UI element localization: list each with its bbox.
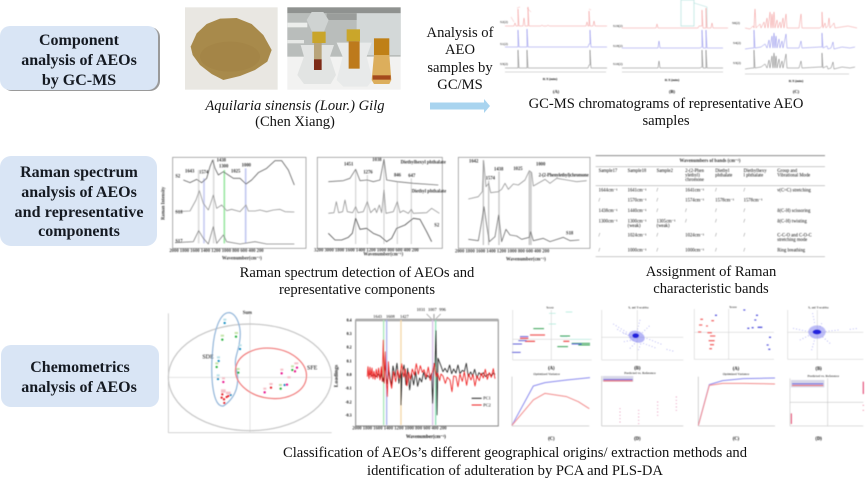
text: analysis step [427, 25, 494, 93]
table body rows: stretching mode [777, 238, 807, 243]
table body rows: Ring breathing [777, 248, 806, 253]
text: analysis step: Analysis of [427, 25, 494, 41]
chart: PCA loadings: -0.3 [345, 413, 352, 418]
chart: Raman spectra of samples: Wavenumber(cm⁻¹) [222, 255, 262, 261]
chart: Raman spectrum of 2-(2-phenylethyl)chromone: 2-(2-Phenylethyl)chromone [539, 173, 589, 178]
PC2 line [367, 340, 495, 397]
chart: PCA loadings: 996 [439, 307, 447, 312]
panel C: response curve: Optimized Variance [533, 372, 560, 376]
panel B: loading plot [788, 305, 863, 372]
PLS-DA panels, adulteration set [694, 305, 863, 442]
text: analysis step: AEO [445, 42, 475, 58]
chart: Raman spectra of phthalates: Wavenumber(cm⁻¹) [363, 251, 404, 257]
chart: PCA loadings: 0.2 [347, 345, 352, 350]
chart: Raman spectra of samples: 1438 [217, 159, 227, 164]
chart: PCA loadings: PC2 [483, 402, 491, 407]
chart: Raman spectra of samples: 1643 [185, 170, 195, 175]
chromatogram A: R.T.(min) [543, 77, 558, 81]
table body rows: / [715, 219, 717, 224]
chart: PCA loadings: 0.3 [347, 331, 352, 336]
table body rows: 1578cm⁻¹ [715, 198, 735, 204]
table body rows: 1300cm⁻¹ [628, 218, 647, 224]
chart: Raman spectra of samples: 1000 [242, 164, 252, 169]
score points [215, 319, 298, 404]
chart: Raman spectra of phthalates: 1451 [344, 162, 354, 167]
panel C: response curve: Optimized Variance [723, 372, 750, 376]
table body rows: δ(C-H) scissoring [777, 209, 811, 214]
arrow [430, 99, 490, 113]
chromatogram C: S3(2) [733, 61, 742, 65]
panel D: predicted vs reference [790, 374, 863, 442]
table header row: Vibrational Mode [777, 173, 810, 178]
chart: Raman spectra of phthalates: 647 [408, 174, 416, 179]
table body rows: / [715, 234, 717, 239]
panel B: loading plot: S, anl T-scabba [808, 305, 829, 310]
table header row: Sample17 [599, 169, 618, 174]
chart: Raman spectra of phthalates: Diethyl phthalate [412, 189, 446, 194]
table body rows: 1000cm⁻¹ [628, 247, 647, 253]
table header row: Group and [777, 169, 798, 174]
chart: Raman spectra of samples: S17 [175, 240, 183, 245]
chromatogram A: S1(2) [500, 42, 509, 46]
chart: Raman spectra of phthalates: S2 [434, 224, 440, 229]
panel B: loading plot: (B) [634, 366, 641, 371]
chromatogram C: (C) [793, 89, 800, 94]
chromatogram C: R.T.(min) [789, 79, 804, 83]
table body rows [599, 187, 812, 253]
label box: Raman analysis [0, 156, 157, 246]
caption: classification: Classification of AEOs’s different geographical origins/ extraction methods and [283, 445, 748, 461]
table body rows: C-C-O and C-O-C [777, 234, 812, 239]
chart: Raman spectra of phthalates [314, 157, 446, 257]
label box: Raman analysis: and representative [14, 204, 144, 221]
panel B: loading plot: (B) [816, 367, 822, 372]
label box: chemometrics: analysis of AEOs [21, 379, 137, 396]
chromatogram C: S6(2) [732, 21, 741, 25]
table body rows: / [599, 199, 601, 204]
table header row: Diethylhexy [744, 169, 767, 174]
chart: Raman spectra of samples: 1574 [199, 170, 209, 175]
chromatogram B: R.T.(min) [665, 78, 680, 82]
chart: Raman spectrum of 2-(2-phenylethyl)chromone: 1574 [486, 176, 496, 181]
caption: Raman detection [240, 265, 475, 298]
table body rows: / [685, 219, 687, 224]
table header row [599, 169, 810, 183]
table body rows: / [744, 219, 746, 224]
caption: chromatograms [529, 96, 803, 129]
table body rows: 1000cm⁻¹ [685, 247, 705, 253]
photo caption: Aquilaria sinensis (Lour.) Gilg [204, 98, 385, 114]
panel A: score plot: Score [729, 305, 737, 309]
photo: agarwood powder [185, 7, 278, 90]
caption: classification [283, 445, 748, 479]
chromatogram A: (A) [553, 89, 560, 94]
photo: oil bottles [287, 7, 401, 90]
panel C: response curve: (C) [733, 437, 740, 442]
panel C: response curve [698, 372, 775, 442]
chart: Raman spectrum of 2-(2-phenylethyl)chromone: 1438 [494, 168, 504, 173]
chart: Raman spectra of samples: 1300 [219, 164, 229, 169]
table body rows: / [657, 234, 659, 239]
table header row: chromone [685, 178, 704, 183]
panel B: loading plot: S, anl T-scabba [628, 305, 649, 310]
chart: PCA score plot: SDE [202, 354, 214, 360]
chart: Raman spectra of phthalates: 1038 [372, 158, 382, 163]
panel D: predicted vs reference: (D) [815, 437, 822, 442]
table body rows: 1305cm⁻¹ [657, 218, 676, 224]
chart: Raman spectra of samples [161, 157, 306, 261]
panel B: loading plot [602, 305, 683, 371]
caption: classification: identification of adulteration by PCA and PLS-DA [367, 463, 663, 479]
panel D: predicted vs reference: (D) [634, 437, 641, 442]
chart: Raman spectrum of 2-(2-phenylethyl)chromone: Wavenumber(cm⁻¹) [506, 257, 546, 263]
table body rows: / [685, 209, 687, 214]
chromatogram C [732, 9, 857, 94]
table body rows: 1024cm⁻¹ [628, 233, 647, 239]
table body rows: / [744, 209, 746, 214]
table body rows: 1570cm⁻¹ [628, 198, 647, 204]
chart: PCA loadings: Wavenumber(cm⁻¹) [406, 434, 446, 440]
chart: Raman spectra of phthalates: 846 [394, 173, 402, 178]
chart: PCA loadings: 1007 [428, 307, 437, 312]
chart: PCA loadings: 0.4 [347, 317, 352, 322]
chart: PCA loadings: -0.1 [345, 386, 352, 391]
table body rows: / [657, 199, 659, 204]
chromatogram B [613, 0, 728, 94]
table body rows: / [744, 248, 746, 253]
label box: chemometrics: Chemometrics [30, 359, 130, 376]
table body rows: 1440cm⁻¹ [628, 208, 647, 214]
chart: Raman spectra of samples: 2000 1800 1600 1400 1200 1000 800 600 400 200 [169, 249, 264, 254]
table body rows: (weak) [628, 224, 641, 229]
table header row: 2-(2-Phen [685, 169, 705, 174]
table body rows: / [657, 248, 659, 253]
chromatogram B: (B) [669, 89, 676, 94]
PLS-DA panels, origin set [512, 305, 683, 442]
label box: component analysis [0, 26, 160, 91]
table body rows: (weak) [657, 224, 670, 229]
table body rows: / [657, 188, 659, 193]
panel A: score plot: (A) [548, 366, 555, 371]
chart: PCA score plot [168, 311, 332, 433]
chart: Raman spectrum of 2-(2-phenylethyl)chromone: 1000 [536, 162, 546, 167]
table body rows: δ(C-H) twisting [777, 219, 807, 224]
PC1 line [368, 331, 495, 415]
label box: Raman analysis: components [38, 223, 120, 240]
panel A: score plot: (A) [733, 367, 740, 372]
table body rows: / [599, 248, 601, 253]
panel D: predicted vs reference: Predicted vs. Reference [808, 374, 840, 378]
photo caption [204, 98, 385, 130]
chart: Raman spectrum of 2-(2-phenylethyl)chromone [455, 157, 590, 263]
table body rows: / [715, 188, 717, 193]
table: assignment of Raman bands: Wavenumbers of bands (cm⁻¹) [680, 158, 741, 164]
table body rows: / [715, 248, 717, 253]
chart: PCA loadings: 1608 [386, 314, 395, 319]
table body rows: 1578cm⁻¹ [744, 198, 763, 204]
table body rows: 1574cm⁻¹ [685, 198, 705, 204]
chart: Raman spectrum of 2-(2-phenylethyl)chromone: 1642 [469, 160, 479, 165]
table body rows: / [599, 234, 601, 239]
table header row: l phthalate [744, 173, 763, 178]
label box: Raman analysis: Raman spectrum [20, 164, 139, 181]
chart: PCA score plot: SFE [307, 365, 318, 371]
table body rows: / [744, 188, 746, 193]
table header row: Sample2 [657, 169, 674, 174]
chart: PCA loadings: PC1 [483, 396, 491, 401]
label box: component analysis: analysis of AEOs [21, 52, 137, 69]
chart: Raman spectrum of 2-(2-phenylethyl)chromone: S18 [566, 232, 574, 237]
chart: GC-MS chromatograms [500, 0, 857, 94]
table: assignment of Raman bands [596, 156, 825, 257]
caption: chromatograms: GC-MS chromatograms of representative AEO [529, 96, 803, 112]
chart: PCA loadings: 0.1 [347, 358, 352, 363]
chart: PCA loadings: 0.0 [347, 372, 352, 377]
panel D: predicted vs reference: Predicted vs. Reference [624, 371, 656, 375]
panel D: predicted vs reference [602, 371, 683, 442]
table header row: Sample18 [628, 169, 647, 174]
chart: Raman spectra of samples: S18 [175, 210, 183, 215]
chromatogram C: S4(2) [733, 41, 742, 45]
chart: PCA score plot: Sum [243, 311, 252, 316]
caption: Raman assignment: characteristic bands [653, 281, 769, 297]
table body rows: 1438cm⁻¹ [599, 208, 618, 214]
caption: Raman assignment: Assignment of Raman [646, 264, 777, 280]
caption: chromatograms: samples [642, 113, 690, 129]
panel A: score plot: Score [546, 305, 554, 309]
table body rows: 1300cm⁻¹ [599, 218, 618, 224]
chart: Raman spectra of phthalates: 1276 [363, 171, 373, 176]
caption: Raman detection: Raman spectrum detection of AEOs and [240, 265, 475, 281]
chromatogram B: S19(2) [613, 24, 623, 28]
chart: Raman spectrum of 2-(2-phenylethyl)chromone: 2000 1800 1600 1400 1200 1000 800 600 400 200 [455, 250, 550, 255]
chart: Raman spectra of phthalates: 3200 3000 1800 1600 1400 1200 1000 800 600 400 200 [314, 248, 419, 253]
panel C: response curve: (C) [548, 437, 555, 442]
chart: Raman spectra of phthalates: Diethylhexyl phthalate [401, 160, 446, 165]
table body rows: 1641cm⁻¹ [685, 187, 705, 193]
chromatogram A: S3(2) [500, 62, 509, 66]
chart: PCA loadings: 1643 [373, 314, 382, 319]
label box: Raman analysis: analysis of AEOs [21, 184, 137, 201]
table header row: Diethyl [715, 169, 730, 174]
caption: Raman assignment [646, 264, 777, 297]
chart: Raman spectra of samples: S2 [175, 174, 181, 179]
chart: PCA loadings: 1427 [400, 314, 409, 319]
table body rows: / [657, 209, 659, 214]
label box: chemometrics [1, 345, 159, 407]
table body rows: 1024cm⁻¹ [685, 233, 705, 239]
table header row: phthalate [715, 173, 732, 178]
chart: Raman spectra of samples: Raman Intensity [161, 186, 166, 220]
label box: component analysis: Component [39, 32, 120, 49]
chart: PCA loadings: -0.2 [345, 399, 352, 404]
panel A: score plot [512, 305, 592, 371]
table body rows: ν(C=C) stretching [777, 188, 812, 193]
text: analysis step: GC/MS [437, 77, 483, 93]
chart: PCA loadings: 2000 1800 1600 1400 1200 1000 800 600 400 200 [352, 427, 447, 432]
panel C: response curve [512, 372, 590, 442]
chromatogram A [500, 7, 607, 94]
table header row: ylethyl) [685, 173, 700, 178]
chart: PCA loadings: 1031 [417, 307, 425, 312]
text: analysis step: samples by [427, 60, 493, 76]
chromatogram B: S18(2) [613, 44, 623, 48]
table body rows: / [744, 234, 746, 239]
table body rows: 1641cm⁻¹ [628, 187, 647, 193]
label box: component analysis: by GC-MS [42, 72, 116, 89]
table body rows: / [715, 209, 717, 214]
chromatogram B: S16(2) [613, 62, 623, 66]
chart: Raman spectrum of 2-(2-phenylethyl)chromone: 1025 [513, 167, 523, 172]
caption: Raman detection: representative components [279, 282, 435, 298]
chromatogram A: S2(2) [500, 20, 509, 24]
table body rows: 1644cm⁻¹ [599, 187, 618, 193]
chart: PCA loadings: Loadings [334, 364, 340, 387]
panel A: score plot [694, 305, 774, 372]
photo caption: (Chen Xiang) [255, 114, 335, 130]
chart: PCA loadings [334, 307, 498, 440]
chart: Raman spectra of samples: 1025 [231, 170, 241, 175]
